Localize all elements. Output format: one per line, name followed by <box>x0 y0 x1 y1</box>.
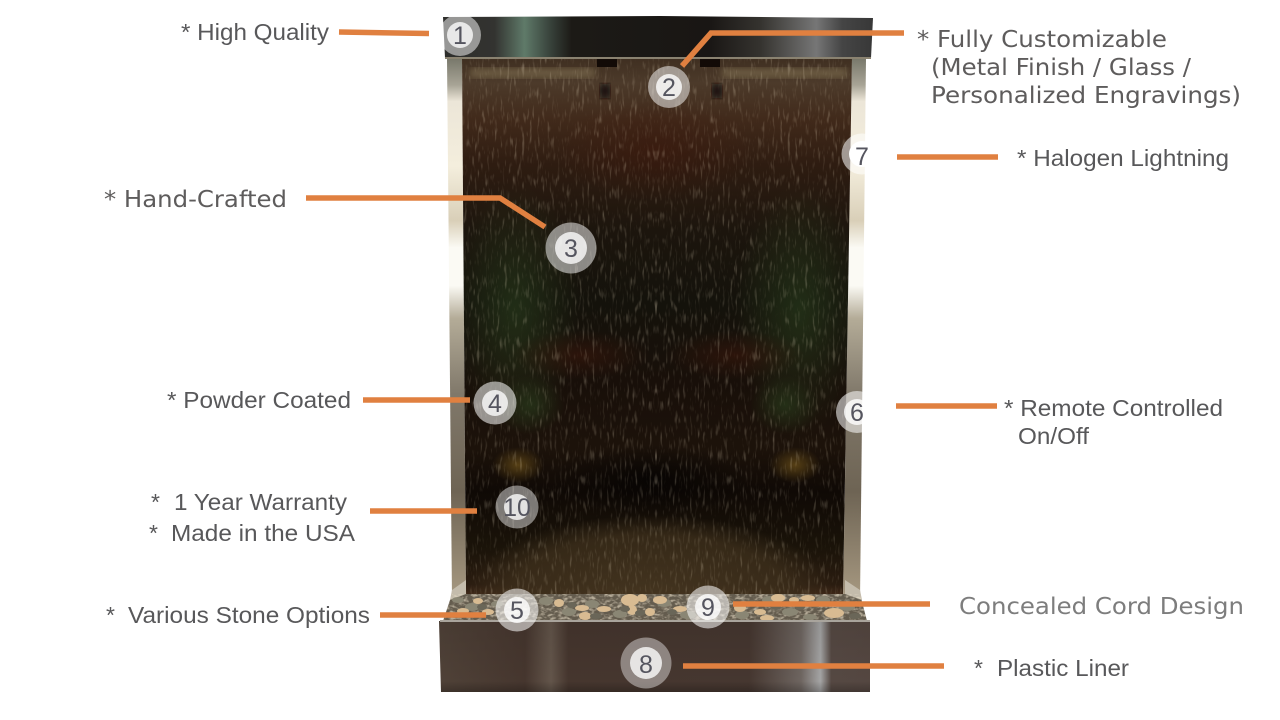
label: various stone options: * <box>106 602 115 628</box>
label: various stone options: Various Stone Options <box>128 602 370 628</box>
marker 7 <box>842 134 882 174</box>
connector line 5 <box>380 612 486 618</box>
marker 3 <box>546 222 596 274</box>
label: warranty and made in USA: 1 Year Warranty <box>174 489 348 515</box>
label: hand-crafted: * Hand-Crafted <box>104 187 287 213</box>
marker 9: 9 <box>701 594 715 622</box>
product: wall fountain <box>439 16 873 692</box>
marker 6: 6 <box>850 399 864 427</box>
label: warranty and made in USA: * <box>151 489 160 515</box>
label: fully customizable: (Metal Finish / Glass / <box>931 55 1191 81</box>
label: fully customizable: * Fully Customizable <box>917 27 1167 53</box>
marker 9 <box>686 586 730 628</box>
marker 1: 1 <box>453 22 467 50</box>
connector line 3 <box>306 198 545 227</box>
connector line 6 <box>896 403 997 409</box>
label: fully customizable <box>917 27 1241 109</box>
pebble bed <box>443 580 867 621</box>
marker 5 <box>496 588 538 632</box>
water panel <box>462 59 852 594</box>
marker 8 <box>620 638 672 688</box>
marker 4: 4 <box>488 390 502 418</box>
label: high quality: * High Quality <box>181 19 330 45</box>
marker 10: 10 <box>503 494 531 522</box>
connector line 7 <box>897 154 998 160</box>
connector line 4 <box>363 397 470 403</box>
left metal frame strip <box>447 58 466 600</box>
marker 2 <box>648 66 690 108</box>
marker 7: 7 <box>855 143 869 171</box>
label: plastic liner: * <box>974 655 983 681</box>
label: warranty and made in USA <box>149 489 356 546</box>
label: fully customizable: Personalized Engravings) <box>931 83 1241 109</box>
connector line 2 <box>682 33 904 66</box>
connector line 9 <box>733 601 930 607</box>
label: plastic liner: Plastic Liner <box>997 655 1129 681</box>
label: halogen lightning: * Halogen Lightning <box>1017 145 1229 171</box>
marker 4 <box>474 382 516 424</box>
marker 5: 5 <box>510 597 524 625</box>
connector line 10 <box>370 508 477 514</box>
right metal frame strip <box>843 58 866 600</box>
marker 3: 3 <box>564 235 578 263</box>
connector line 1 <box>339 32 429 34</box>
label: remote controlled <box>1004 395 1223 449</box>
marker 1 <box>439 14 481 56</box>
marker 2: 2 <box>662 74 676 102</box>
metal base box <box>439 620 870 692</box>
label: powder coated: * Powder Coated <box>167 387 351 413</box>
marker 6 <box>836 391 878 433</box>
marker 10 <box>496 486 538 528</box>
label: remote controlled: On/Off <box>1018 423 1090 449</box>
marker 8: 8 <box>639 651 653 679</box>
label: concealed cord design: Concealed Cord Design <box>959 594 1244 620</box>
label: warranty and made in USA: Made in the USA <box>171 520 356 546</box>
connector line 8 <box>683 663 944 669</box>
label: warranty and made in USA: * <box>149 520 158 546</box>
top metal cap <box>443 16 873 59</box>
label: remote controlled: * Remote Controlled <box>1004 395 1223 421</box>
